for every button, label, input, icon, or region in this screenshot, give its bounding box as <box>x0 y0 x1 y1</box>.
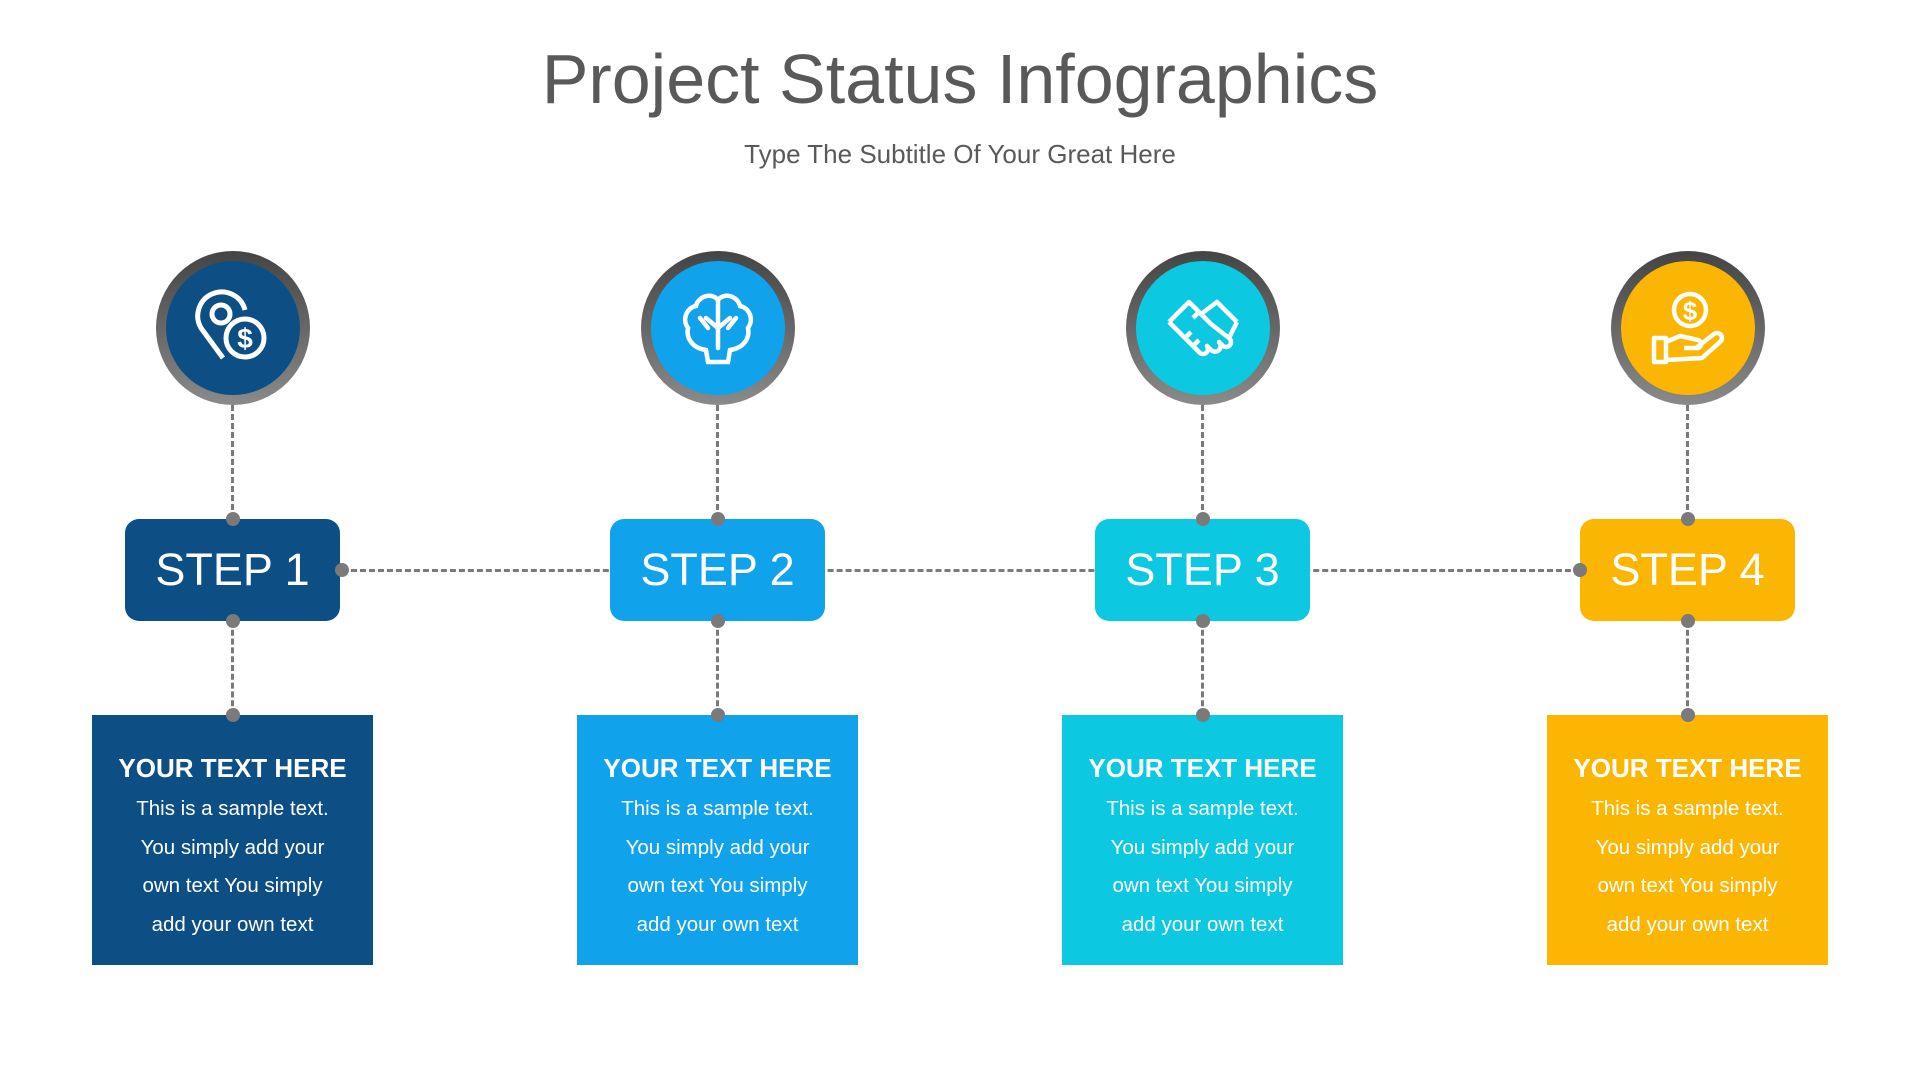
icon: handshake <box>1126 251 1280 405</box>
step label 2: STEP 2 <box>640 544 795 595</box>
text box 1 <box>92 715 373 965</box>
icon: hand coin <box>1611 251 1765 405</box>
text box 1: This is a sample text. <box>136 797 329 820</box>
step label 4: STEP 4 <box>1610 544 1765 595</box>
step label 3: STEP 3 <box>1125 544 1280 595</box>
icon: location dollar <box>156 251 310 405</box>
text box 3: You simply add your <box>1111 836 1294 858</box>
subtitle: Type The Subtitle Of Your Great Here <box>744 139 1176 169</box>
step 3 column <box>1062 251 1343 965</box>
step 4 column <box>1547 251 1828 965</box>
text box 2: This is a sample text. <box>621 797 814 820</box>
text box 3: This is a sample text. <box>1106 797 1299 820</box>
text box 4: This is a sample text. <box>1591 797 1784 820</box>
text box 1: You simply add your <box>141 836 324 858</box>
text box 3: YOUR TEXT HERE <box>1088 753 1317 783</box>
step label 4 <box>1580 519 1795 621</box>
text box 4 <box>1547 715 1828 965</box>
title: Project Status Infographics <box>542 40 1378 118</box>
step 2 column <box>577 251 858 965</box>
text box 1: add your own text <box>152 912 313 936</box>
text box 4: You simply add your <box>1596 836 1779 858</box>
text box 2 <box>577 715 858 965</box>
text box 4: add your own text <box>1607 912 1768 936</box>
text box 2: YOUR TEXT HERE <box>603 753 832 783</box>
text box 3: own text You simply <box>1112 874 1293 897</box>
text box 4: YOUR TEXT HERE <box>1573 753 1802 783</box>
icon: hand coin: $ <box>1683 296 1698 326</box>
text box 3: add your own text <box>1122 912 1283 936</box>
text box 1: YOUR TEXT HERE <box>118 753 347 783</box>
text box 4: own text You simply <box>1597 874 1778 897</box>
icon: brain <box>641 251 795 405</box>
text box 2: own text You simply <box>627 874 808 897</box>
horizontal connector <box>342 569 1580 572</box>
step label 1 <box>125 519 340 621</box>
step 1 column <box>92 251 373 965</box>
text box 1: own text You simply <box>142 874 323 897</box>
text box 3 <box>1062 715 1343 965</box>
step label 3 <box>1095 519 1310 621</box>
text box 2: add your own text <box>637 912 798 936</box>
icon: location dollar: $ <box>237 323 253 354</box>
step label 1: STEP 1 <box>155 544 310 595</box>
text box 2: You simply add your <box>626 836 809 858</box>
step label 2 <box>610 519 825 621</box>
